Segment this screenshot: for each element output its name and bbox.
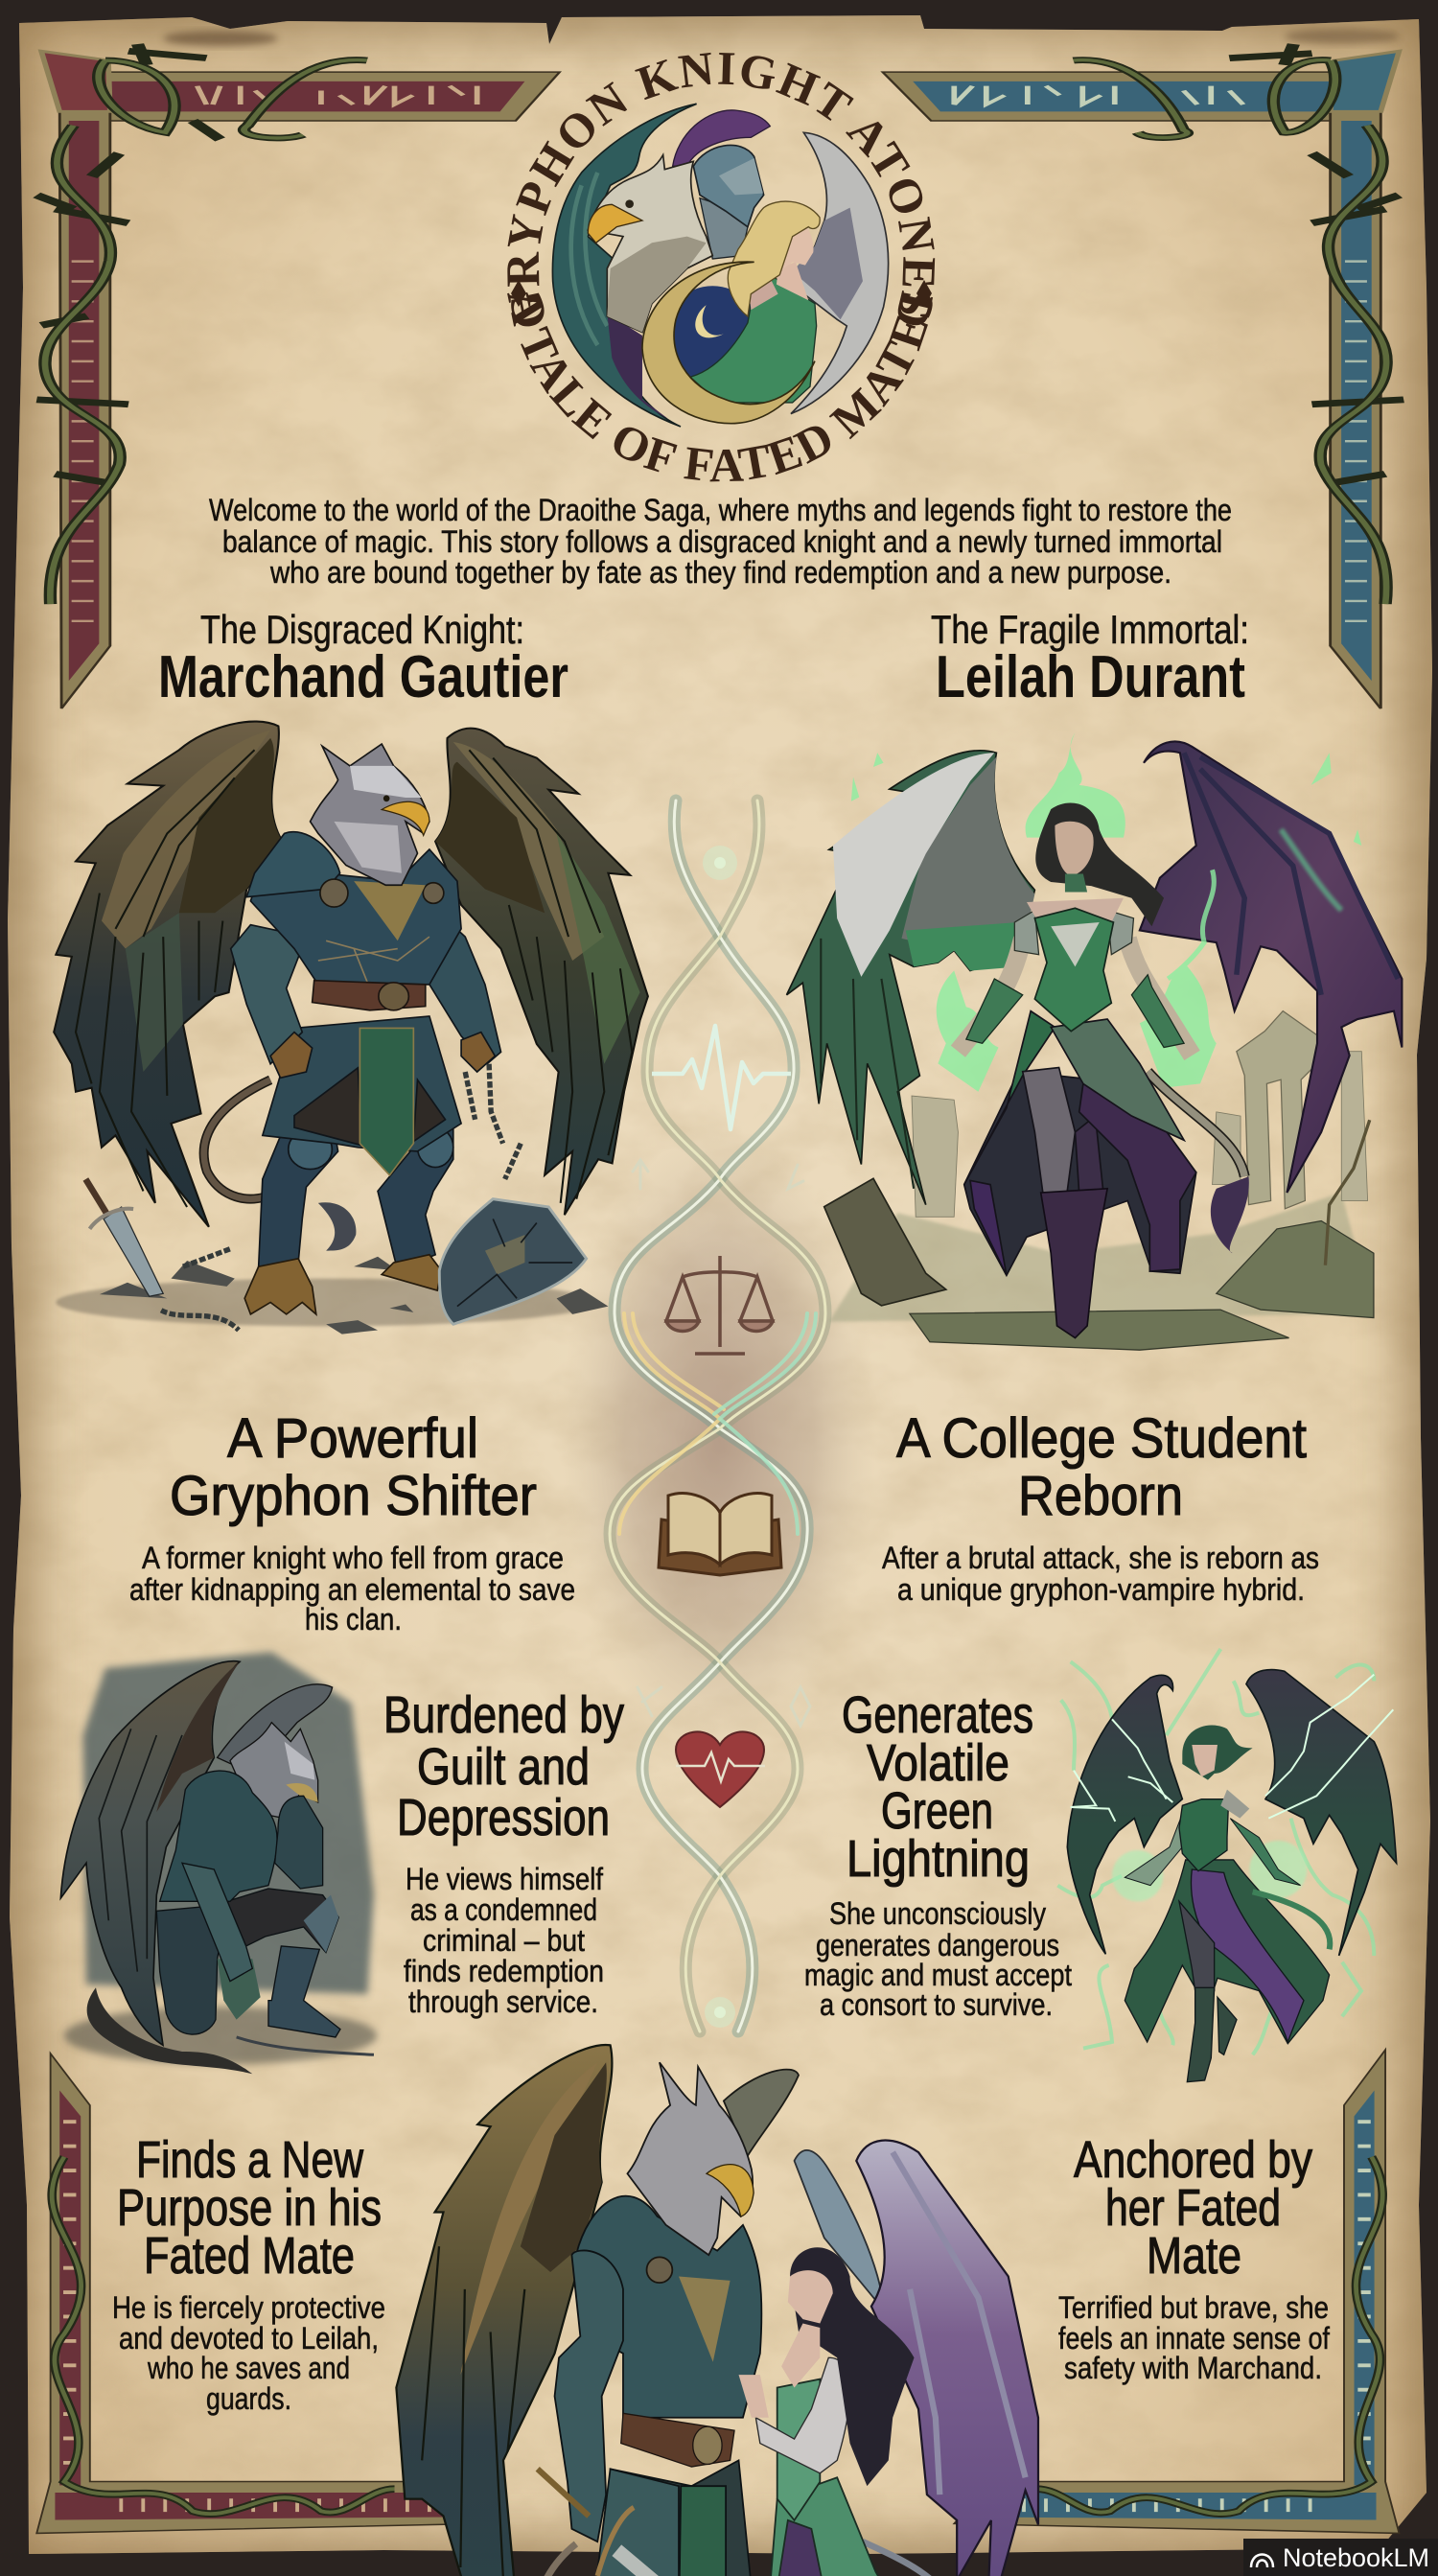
logo: golden crescent shield [642, 262, 815, 424]
Leilah sleeve [755, 2357, 850, 2473]
text: Finds a New Purpose: Finds a New [136, 2131, 364, 2189]
ground shadow [64, 2007, 377, 2064]
Leilah hand [739, 2375, 769, 2418]
outer pale lightning [1057, 1649, 1374, 2054]
text: brutal attack [882, 1541, 1319, 1607]
text: Burdened: Depression [397, 1789, 610, 1846]
intro text [209, 493, 1232, 590]
arms [958, 910, 1193, 1056]
illustration: Leilah [787, 732, 1402, 1350]
bottom-right blue frame [954, 2050, 1399, 2533]
intro text: balance of magic. This story follows a disgraced knight and a newly turned immortal [222, 524, 1222, 559]
logo: teal wing [552, 104, 697, 427]
text: fiercely protective: and devoted to Leilah, [119, 2321, 379, 2356]
text: fiercely protective [112, 2290, 385, 2416]
tail [204, 1079, 356, 1251]
intro text: who are bound together by fate as they find redemption and a new purpose. [269, 555, 1171, 590]
logo emblem [552, 104, 889, 427]
raised arm [275, 1796, 323, 1889]
right bat wing [1246, 1670, 1397, 1956]
legs and boots [1179, 1901, 1237, 2082]
hair [1035, 802, 1164, 926]
sword [538, 2469, 758, 2576]
arms [1125, 1805, 1186, 1886]
text: Anchored by [1074, 2131, 1312, 2285]
arms [231, 913, 501, 1078]
heading: Leilah Durant: Leilah Durant [936, 644, 1245, 710]
head [230, 1723, 318, 1819]
boots [1041, 1189, 1107, 1338]
far wing [218, 1684, 333, 1774]
helix glow [561, 1122, 877, 1754]
green tabard [360, 1028, 413, 1175]
face [1192, 1745, 1218, 1776]
text: A Powerful Gryphon Shifter [170, 1407, 537, 1527]
green cloth [218, 1959, 261, 2020]
text: Generates: Volatile [867, 1734, 1009, 1792]
right wing [435, 729, 648, 1215]
logo: plume and helmet [673, 110, 770, 259]
text: He views himself [404, 1862, 604, 2019]
Leilah dress [764, 2379, 910, 2576]
text: former knight [129, 1541, 575, 1636]
text: fiercely protective: guards. [206, 2381, 291, 2416]
text: Generates [842, 1686, 1033, 1888]
legs [259, 1124, 453, 1270]
green flames [851, 732, 1361, 1092]
chest gold [679, 2276, 731, 2362]
feathered wing [787, 751, 1034, 1205]
ring diamonds [511, 280, 932, 307]
text: He views himself: through service. [408, 1984, 598, 2019]
Leilah hair [790, 2247, 915, 2486]
text: former knight: A former knight who fell from grace [142, 1541, 564, 1575]
Leilah far wing [795, 2150, 884, 2310]
bodice [1027, 898, 1124, 1032]
tail [87, 1987, 252, 2074]
icon: pulse [652, 1026, 791, 1129]
misty background [83, 1652, 374, 1994]
text: She unconsciously: generates dangerous [816, 1928, 1059, 1962]
gryphon far wing [724, 2070, 799, 2156]
broken sword [85, 1179, 163, 1296]
broken chains [161, 1064, 521, 1330]
helix [610, 801, 825, 2031]
thigh [227, 1889, 338, 1953]
bottom-left maroon frame [36, 2054, 481, 2533]
text: Generates: Lightning [847, 1830, 1030, 1888]
gold chest piece [354, 881, 426, 940]
text: She unconsciously [804, 1896, 1072, 2022]
belt [621, 2413, 734, 2467]
skirt [964, 1011, 1196, 1275]
face [1055, 822, 1094, 892]
illustration: Marchand gryphon knight [54, 722, 648, 1334]
text: Anchored by: Mate [1147, 2227, 1241, 2285]
left wing [54, 722, 283, 1227]
text: He views himself: criminal – but [423, 1923, 585, 1958]
intro text: Welcome to the world of the Draoithe Saga, where myths and legends fight to restore the [209, 493, 1232, 527]
near wing [60, 1661, 240, 2045]
border: top corners [36, 44, 1403, 708]
text: Anchored by: her Fated [1105, 2179, 1281, 2237]
text: Burdened: Burdened by [383, 1686, 624, 1744]
logo: woman with green dress [690, 201, 820, 403]
text: Finds a New Purpose: Fated Mate [144, 2227, 355, 2285]
gryphon head [627, 2062, 754, 2255]
icon: scales [666, 1256, 773, 1354]
text: brutal attack: After a brutal attack, she is reborn as [882, 1541, 1319, 1575]
border: bottom corners [36, 2050, 1399, 2533]
chain [237, 2037, 374, 2054]
bodice [1179, 1799, 1229, 1871]
text: former knight: his clan. [305, 1602, 402, 1636]
back leg [156, 1905, 227, 2034]
left bat wing [1067, 1675, 1182, 1954]
ruins and ground [824, 1011, 1374, 1350]
top-right blue frame [883, 44, 1403, 708]
hair [1182, 1726, 1253, 1780]
claws [244, 1255, 441, 1314]
text: Terrified but brave [1058, 2290, 1330, 2385]
illustration: kneeling gryphon [60, 1652, 377, 2074]
text: A College Student Reborn: Reborn [1018, 1465, 1183, 1527]
gryphon arm [555, 2250, 623, 2541]
text: Burdened [383, 1686, 624, 1846]
lower armor [263, 1016, 461, 1151]
text: brutal attack: a unique gryphon-vampire hybrid. [897, 1572, 1305, 1607]
ring text bottom: A TALE OF FATED MATES [507, 292, 933, 481]
logo: navy moon disc [663, 286, 762, 385]
text: Anchored by: Anchored by [1074, 2131, 1312, 2189]
ring title [507, 52, 936, 481]
text: Terrified but brave: safety with Marchand. [1064, 2351, 1322, 2385]
illustration: couple [396, 2045, 1038, 2576]
text: fiercely protective: He is fiercely protective [112, 2290, 385, 2325]
heading: Marchand Gautier [158, 607, 568, 710]
text: She unconsciously: She unconsciously [829, 1896, 1046, 1931]
badge: NotebookLM [1243, 2539, 1438, 2576]
broken shield [439, 1199, 587, 1324]
top-left maroon frame [36, 44, 560, 708]
torso armor [250, 849, 461, 985]
knee [304, 1895, 338, 1953]
text: Generates: Green [881, 1782, 993, 1840]
magic orbs [1112, 1841, 1307, 1901]
text: Finds a New Purpose: Purpose in his [117, 2179, 382, 2237]
text: He views himself: finds redemption [404, 1954, 604, 1988]
icon: open book [659, 1494, 781, 1575]
Leilah face and neck [781, 2270, 833, 2388]
icon: heart [676, 1731, 765, 1807]
torso armor [576, 2196, 761, 2418]
heading: Marchand Gautier: Marchand Gautier [158, 644, 568, 710]
text: He views himself: He views himself [406, 1862, 603, 1896]
text: Burdened: Guilt and [417, 1738, 590, 1796]
tail [1253, 1891, 1330, 1949]
heading: Leilah Durant: The Fragile Immortal: [931, 607, 1249, 652]
logo: small crescent [695, 305, 724, 337]
head [311, 744, 429, 885]
bat wing [1140, 741, 1402, 1193]
ground [56, 1257, 608, 1334]
text: Terrified but brave: feels an innate sense of [1058, 2321, 1330, 2356]
gryphon tail [535, 2543, 576, 2576]
text: He views himself: as a condemned [410, 1892, 597, 1927]
text: A College Student Reborn [896, 1407, 1307, 1527]
text: A College Student Reborn: A College Student [896, 1407, 1307, 1470]
text: Generates: Generates [842, 1686, 1033, 1744]
text: Terrified but brave: Terrified but brave, she [1058, 2290, 1329, 2325]
tail [1148, 1072, 1249, 1253]
Leilah tail [863, 2541, 957, 2576]
illustration: lightning Leilah [1057, 1649, 1397, 2082]
logo: gryphon head [588, 155, 712, 333]
heading: Marchand Gautier: The Disgraced Knight: [200, 607, 524, 652]
logo: silver wing [791, 132, 889, 414]
lower arm [182, 1863, 252, 1982]
belt [313, 981, 426, 1010]
cape [1220, 1790, 1249, 1819]
pauldron [246, 832, 340, 897]
skirt [1125, 1860, 1330, 2044]
text: She unconsciously: magic and must accept [804, 1958, 1072, 1992]
lower armor [589, 2460, 760, 2576]
heading: Leilah Durant [931, 607, 1249, 710]
text: Finds a New Purpose [117, 2131, 382, 2285]
text: former knight: after kidnapping an elemental to save [129, 1572, 575, 1607]
gryphon near wing [396, 2045, 612, 2576]
text: fiercely protective: who he saves and [147, 2351, 350, 2385]
Leilah bat wing [856, 2141, 1038, 2576]
badge: NotebookLM: NotebookLM [1283, 2543, 1429, 2572]
torso armor [160, 1771, 277, 1901]
shin and boot [268, 1946, 340, 2037]
text: She unconsciously: a consort to survive. [820, 1987, 1053, 2022]
text: A Powerful Gryphon Shifter: A Powerful [227, 1407, 478, 1470]
ring text top: GRYPHON KNIGHT ATONED [507, 52, 936, 326]
text: A Powerful Gryphon Shifter: Gryphon Shifter [170, 1465, 537, 1527]
bright lightning [1071, 1675, 1393, 1822]
